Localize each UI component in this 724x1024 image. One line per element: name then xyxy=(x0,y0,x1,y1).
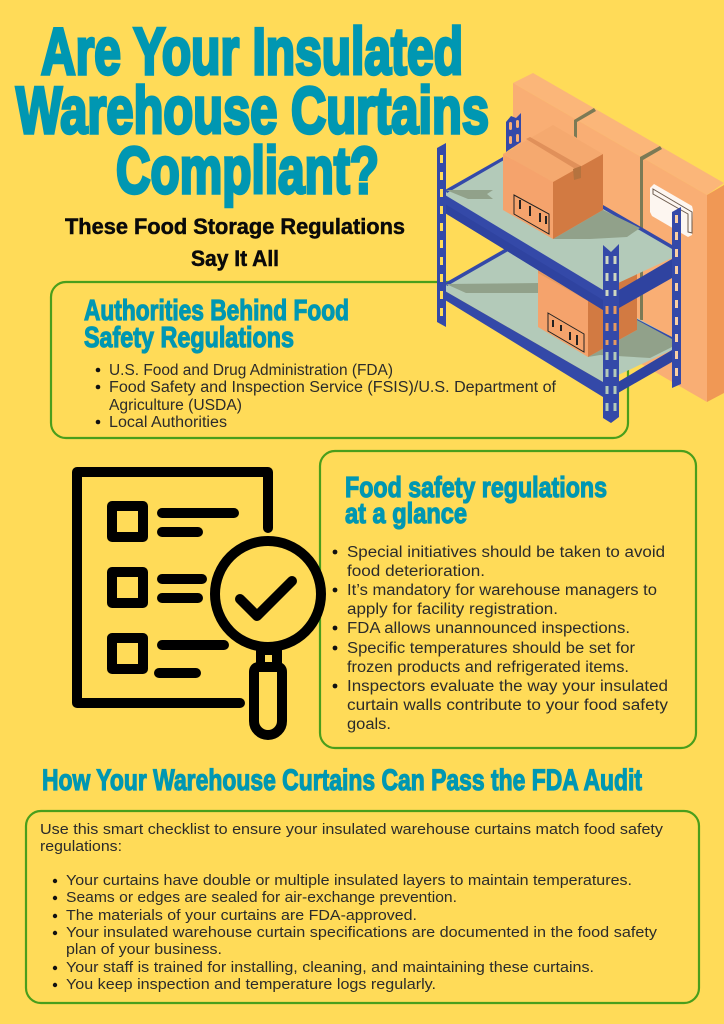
panel: food safety regulations at a glance xyxy=(320,451,696,748)
glance list: Special initiatives should be taken to avoid xyxy=(347,544,665,561)
glance list: Specific temperatures should be set for xyxy=(347,640,635,657)
right post xyxy=(672,207,681,388)
subtitle xyxy=(65,214,405,271)
heading: at a glance xyxy=(345,472,607,530)
heading: authorities: Safety Regulations xyxy=(84,322,294,354)
title: Are Your Insulated xyxy=(41,14,463,88)
heading: at a glance: Food safety regulations xyxy=(345,472,607,504)
icon: checklist with magnifying glass xyxy=(77,472,321,735)
front post xyxy=(603,244,619,423)
authorities list xyxy=(96,362,557,431)
glance list: apply for facility registration. xyxy=(347,601,558,618)
title xyxy=(16,14,489,207)
heading: authorities xyxy=(84,295,349,354)
lower beams xyxy=(445,291,672,397)
panel: authorities behind food safety regulations xyxy=(51,282,628,438)
heading: authorities: Authorities Behind Food xyxy=(84,295,349,327)
upper beams xyxy=(445,195,672,310)
checklist items: plan of your business. xyxy=(66,942,222,958)
checklist items: Your curtains have double or multiple insulated layers to maintain temperatures. xyxy=(66,873,632,889)
checklist items: The materials of your curtains are FDA-approved. xyxy=(66,908,417,924)
checklist items: Your insulated warehouse curtain specifications are documented in the food safety xyxy=(66,925,658,941)
glance list: food deterioration. xyxy=(347,563,485,580)
authorities list: U.S. Food and Drug Administration (FDA) xyxy=(109,362,393,379)
lower shelf xyxy=(445,247,672,382)
glance list: frozen products and refrigerated items. xyxy=(347,659,629,676)
checklist intro: Use this smart checklist to ensure your insulated warehouse curtains match food safety xyxy=(40,822,664,838)
glance list: It’s mandatory for warehouse managers to xyxy=(347,582,657,599)
checklist intro: regulations: xyxy=(40,839,122,855)
panel: smart checklist xyxy=(26,811,699,1003)
title: Compliant? xyxy=(116,133,379,207)
subtitle: Say It All xyxy=(191,246,279,271)
glance list: FDA allows unannounced inspections. xyxy=(347,620,630,637)
lower box xyxy=(538,270,637,357)
checklist intro xyxy=(40,822,664,855)
checklist items: Seams or edges are sealed for air-exchange prevention. xyxy=(66,890,457,906)
large carton behind shelf xyxy=(513,73,724,402)
glance list: goals. xyxy=(347,716,391,733)
title: Warehouse Curtains xyxy=(16,73,489,147)
upper box xyxy=(503,125,603,239)
glance list xyxy=(333,544,668,733)
glance list: Inspectors evaluate the way your insulated xyxy=(347,678,668,695)
glance list: curtain walls contribute to your food safety xyxy=(347,697,668,714)
left post xyxy=(437,143,446,327)
checklist items: Your staff is trained for installing, cleaning, and maintaining these curtains. xyxy=(66,960,594,976)
heading: at a glance: at a glance xyxy=(345,498,467,530)
icon: warehouse shelf with boxes xyxy=(437,73,724,423)
checklist items xyxy=(53,873,658,993)
subtitle: These Food Storage Regulations xyxy=(65,214,405,239)
checklist items: You keep inspection and temperature logs regularly. xyxy=(66,977,436,993)
authorities list: Local Authorities xyxy=(109,414,227,431)
back post xyxy=(506,113,521,152)
upper shelf xyxy=(445,157,672,290)
authorities list: Food Safety and Inspection Service (FSIS)/U.S. Department of xyxy=(109,379,557,396)
authorities list: Agriculture (USDA) xyxy=(109,397,242,414)
